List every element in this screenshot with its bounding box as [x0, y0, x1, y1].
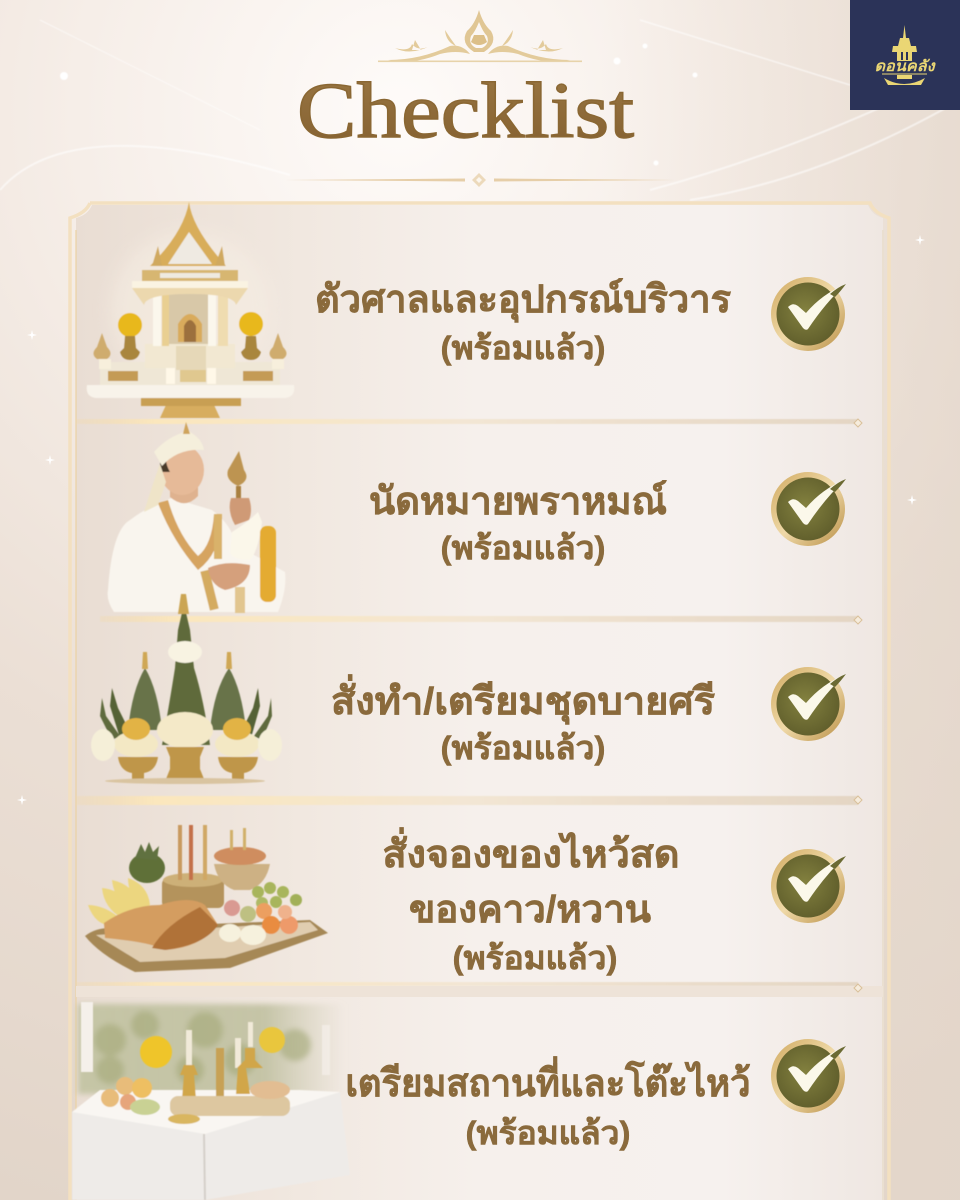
row 4 check icon	[771, 849, 846, 923]
row 3 text: (พร้อมแล้ว)	[440, 730, 606, 766]
row 5 check icon	[771, 1039, 846, 1113]
row 3 check icon	[771, 667, 846, 741]
row 1 shrine illustration	[87, 202, 294, 418]
row 5 altar table illustration	[72, 1002, 350, 1200]
row 5 text: (พร้อมแล้ว)	[466, 1115, 630, 1151]
row 1 check icon	[771, 277, 846, 351]
divider 3	[76, 796, 862, 805]
row 3 baisri illustration	[91, 594, 282, 784]
row 5 text	[346, 1056, 750, 1151]
row 5 text: เตรียมสถานที่และโต๊ะไหว้	[346, 1056, 750, 1105]
row 2 text	[369, 480, 667, 566]
row 2 check icon	[771, 472, 846, 546]
row 4 text: สั่งจองของไหว้สด	[382, 827, 680, 876]
row 2 text: (พร้อมแล้ว)	[440, 530, 606, 566]
divider 4	[76, 982, 883, 997]
foliage backdrop	[78, 1004, 346, 1094]
row 3 text	[331, 674, 716, 766]
divider 2	[100, 616, 862, 624]
logo: shrine emblem	[882, 25, 927, 85]
row 4 text	[382, 827, 680, 976]
row 3 text: สั่งทำ/เตรียมชุดบายศรี	[331, 674, 716, 725]
row 2 text: นัดหมายพราหมณ์	[369, 480, 667, 523]
title ornament	[378, 10, 582, 62]
divider 1	[76, 419, 862, 427]
title: Checklist	[297, 68, 634, 155]
title divider	[285, 173, 675, 187]
logo badge	[850, 0, 960, 110]
row 1 text	[315, 278, 732, 366]
row 1 text: ตัวศาลและอุปกรณ์บริวาร	[315, 278, 732, 323]
row 1 text: (พร้อมแล้ว)	[440, 330, 606, 366]
row 2 brahmin illustration	[108, 422, 285, 613]
logo text: ดอนคลัง	[874, 58, 936, 75]
row 4 text: (พร้อมแล้ว)	[452, 940, 618, 976]
row 4 offerings illustration	[85, 825, 328, 972]
row 4 text: ของคาว/หวาน	[409, 889, 651, 931]
main panel frame	[70, 203, 889, 1200]
